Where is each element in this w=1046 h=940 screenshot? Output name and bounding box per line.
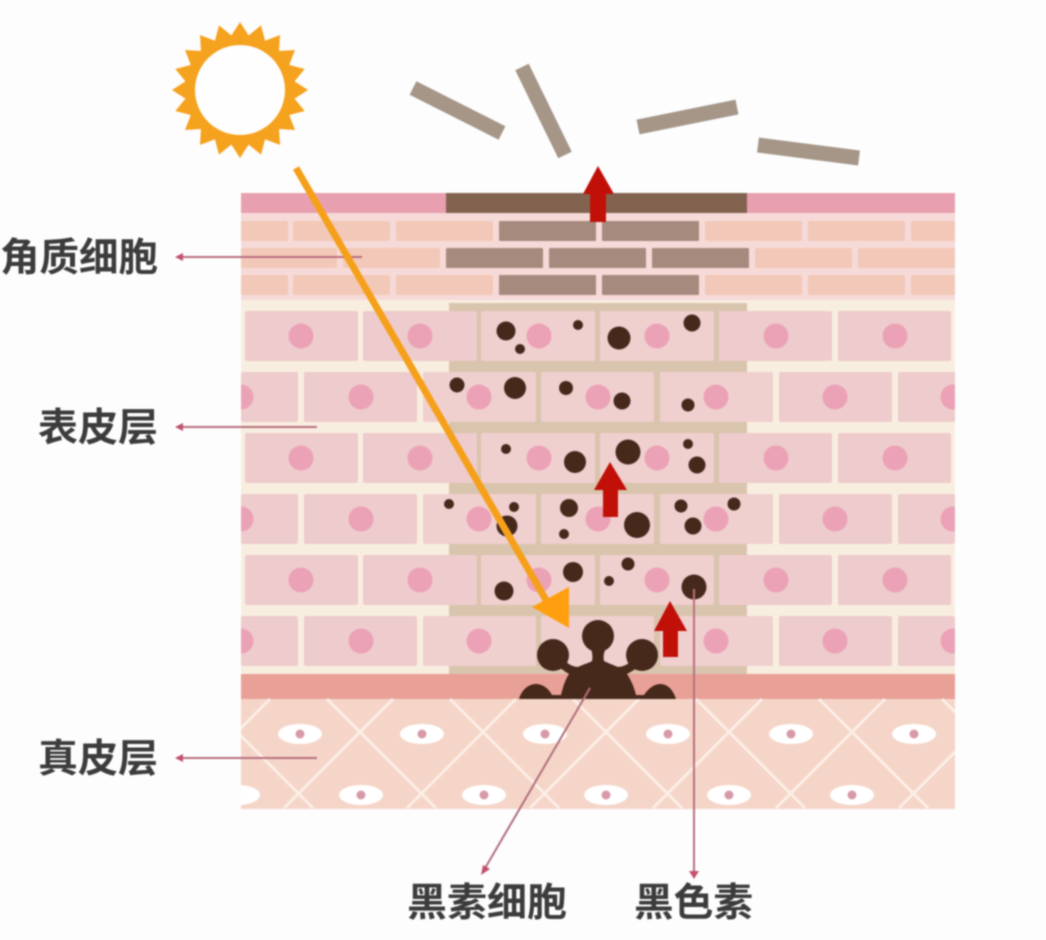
melanin granules (444, 314, 740, 600)
shed dead skin flakes (413, 67, 859, 158)
arrow: melanin rising mid (594, 462, 627, 517)
pointer line: epidermis (175, 423, 317, 431)
arrow: melanin rising low (654, 601, 687, 657)
label: melanin: 黑色素 (634, 882, 753, 925)
label: epidermis: 表皮层 (38, 407, 158, 450)
arrow: flakes shed upward (583, 166, 614, 222)
pointer line: melanin (689, 589, 699, 879)
dermis layer (240, 698, 956, 810)
label: dermis: 真皮层 (38, 738, 158, 781)
pointer line: melanocyte (481, 688, 590, 875)
stratum corneum layer (241, 193, 955, 303)
icon: sun (172, 22, 308, 158)
melanocyte cell (519, 620, 676, 699)
basement membrane band (241, 674, 955, 699)
epidermis layer (228, 300, 966, 676)
arrow: UV ray (296, 168, 569, 628)
pointer line: dermis (175, 754, 317, 762)
pointer line: keratinocyte (175, 253, 362, 261)
label: keratinocyte: 角质细胞 (0, 237, 158, 280)
label: melanocyte: 黑素细胞 (407, 882, 567, 925)
